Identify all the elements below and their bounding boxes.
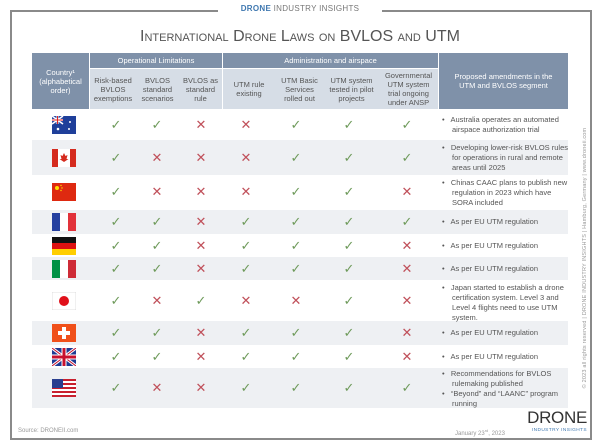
sub headers: Governmental	[385, 71, 432, 80]
row: Canada	[52, 143, 568, 172]
row: China: ✕	[402, 184, 412, 199]
row: China: • Chinas CAAC plans to publish new regulation in 2023 which have SORA included	[442, 178, 567, 207]
header	[32, 53, 568, 109]
row: France: ✓	[344, 214, 354, 229]
header: operational limitations	[90, 53, 222, 68]
sub headers: trial ongoing	[388, 89, 429, 98]
row: Japan: • Japan started to establish a drone certification system. Level 3 and Level 4 flights need to use UTM system.	[442, 283, 564, 322]
row: Japan: ✓	[344, 293, 354, 308]
row: Germany: ✓	[291, 238, 301, 253]
row: Germany: ✕	[402, 238, 412, 253]
sub headers: UTM system	[330, 76, 373, 84]
row: Switzerland: ✓	[291, 325, 301, 340]
row: China: ✓	[111, 184, 121, 199]
sub headers: under ANSP	[388, 98, 429, 107]
row: Japan: ✓	[196, 293, 206, 308]
header: proposed: Proposed amendments in the	[454, 72, 552, 81]
sub headers: BVLOS	[100, 84, 126, 94]
header: operational limitations: Operational Limitations	[118, 56, 194, 65]
row: United States: ✓	[344, 380, 354, 395]
row: Germany: ✓	[344, 238, 354, 253]
row: United Kingdom: ✓	[241, 349, 251, 364]
row: United States: ✓	[111, 380, 121, 395]
sub headers: rolled out	[284, 94, 315, 102]
sub headers: existing	[236, 89, 262, 98]
row: Canada: ✕	[152, 150, 162, 165]
row: Germany: ✓	[152, 238, 162, 253]
header: country: order)	[50, 86, 70, 94]
row: Australia: • Australia operates an automated airspace authorization trial	[442, 115, 559, 134]
row: Canada: ✕	[196, 150, 206, 165]
row: United Kingdom: ✕	[196, 349, 206, 364]
row: Switzerland	[52, 324, 538, 342]
row: United States: ✓	[402, 380, 412, 395]
row: Canada: ✓	[402, 150, 412, 165]
row shading	[32, 140, 568, 175]
row: Canada: ✓	[111, 150, 121, 165]
row: Canada: • Developing lower-risk BVLOS rules for operations in rural and remote areas until 2025	[442, 143, 568, 172]
row: Japan: ✕	[241, 293, 251, 308]
row: Australia: ✓	[291, 117, 301, 132]
row: Germany: • As per EU UTM regulation	[442, 241, 538, 250]
sub headers: projects	[338, 94, 365, 102]
row: China: ✕	[196, 184, 206, 199]
row: China: ✕	[152, 184, 162, 199]
sub headers: BVLOS as	[183, 76, 218, 84]
row: China: ✓	[291, 184, 301, 199]
row: United Kingdom: ✓	[111, 349, 121, 364]
sub headers: BVLOS	[145, 76, 170, 84]
header: country: Country¹	[46, 68, 75, 76]
sub headers	[90, 69, 438, 109]
row: China: ✓	[344, 184, 354, 199]
logo: INDUSTRY INSIGHTS	[532, 428, 587, 433]
row: Germany	[52, 237, 538, 255]
sub headers: UTM Basic	[281, 76, 318, 84]
header: country	[32, 53, 89, 109]
header: proposed: UTM and BVLOS segment	[459, 81, 548, 90]
row: Germany: ✓	[111, 238, 121, 253]
row: Japan: ✕	[152, 293, 162, 308]
row: Canada: ✓	[344, 150, 354, 165]
row: China	[52, 178, 568, 207]
row: Switzerland: ✕	[402, 325, 412, 340]
header: proposed	[439, 53, 568, 109]
row: France: ✓	[402, 214, 412, 229]
logo: DRONE	[527, 408, 587, 427]
row: Australia: ✕	[196, 117, 206, 132]
header: administration	[223, 53, 438, 68]
row: Australia: ✓	[402, 117, 412, 132]
top brand label	[218, 4, 382, 16]
row: United States: • Recommendations for BVLOS rulemaking published	[442, 369, 551, 388]
sub headers: standard	[186, 84, 215, 94]
row: United Kingdom: ✓	[152, 349, 162, 364]
row: China: ✕	[241, 184, 251, 199]
row: United States: ✓	[291, 380, 301, 395]
row: Italy: ✓	[111, 261, 121, 276]
row: Switzerland: • As per EU UTM regulation	[442, 328, 538, 337]
row: France: ✓	[291, 214, 301, 229]
row: United Kingdom: ✓	[291, 349, 301, 364]
row: Italy	[52, 260, 538, 278]
date: January 23rd , 2023	[455, 428, 505, 437]
row: Switzerland: ✕	[196, 325, 206, 340]
row: Italy: ✓	[152, 261, 162, 276]
row: France: • As per EU UTM regulation	[442, 217, 538, 226]
row: Italy: ✓	[291, 261, 301, 276]
row: France	[52, 213, 538, 231]
row: United States: ✕	[196, 380, 206, 395]
row: United States: ✓	[241, 380, 251, 395]
sub headers: Risk-based	[94, 76, 132, 84]
row: France: ✓	[152, 214, 162, 229]
row: Switzerland: ✓	[111, 325, 121, 340]
source footer: Source: DRONEII.com	[18, 428, 78, 434]
header: country: (alphabetical	[39, 76, 82, 86]
row: Japan	[52, 283, 564, 322]
header: administration: Administration and airspace	[284, 56, 377, 65]
sub headers: exemptions	[94, 94, 132, 102]
row: United States: ✕	[152, 380, 162, 395]
row: Switzerland: ✓	[241, 325, 251, 340]
sub headers: standard	[143, 84, 172, 94]
top brand label: DRONE INDUSTRY INSIGHTS	[241, 4, 359, 13]
title: International Drone Laws on BVLOS and UTM	[140, 28, 460, 45]
sub headers: UTM system	[387, 80, 430, 89]
row: Italy: ✓	[241, 261, 251, 276]
row: Australia: ✓	[152, 117, 162, 132]
row: United Kingdom: • As per EU UTM regulation	[442, 352, 538, 361]
row: Italy: ✕	[402, 261, 412, 276]
row: Japan: ✕	[402, 293, 412, 308]
row: Switzerland: ✓	[152, 325, 162, 340]
row: Australia	[52, 115, 559, 134]
sub headers: scenarios	[141, 94, 174, 102]
sub headers: Services	[285, 84, 314, 94]
row: Italy: ✓	[344, 261, 354, 276]
row: Italy: ✕	[196, 261, 206, 276]
row: Germany: ✓	[241, 238, 251, 253]
row: Japan: ✕	[291, 293, 301, 308]
row: United States	[52, 369, 558, 408]
sub headers: UTM rule	[234, 80, 264, 89]
sub headers: rule	[194, 94, 207, 102]
row: France: ✓	[111, 214, 121, 229]
row: Switzerland: ✓	[344, 325, 354, 340]
row: United Kingdom	[52, 348, 538, 366]
row: France: ✕	[196, 214, 206, 229]
row: Australia: ✓	[344, 117, 354, 132]
row: United Kingdom: ✓	[344, 349, 354, 364]
row: Canada: ✕	[241, 150, 251, 165]
sub headers: tested in pilot	[329, 84, 374, 94]
row: Germany: ✕	[196, 238, 206, 253]
row: Australia: ✓	[111, 117, 121, 132]
row: France: ✓	[241, 214, 251, 229]
row: Italy: • As per EU UTM regulation	[442, 264, 538, 273]
row: Canada: ✓	[291, 150, 301, 165]
text: © 2023 all rights reserved | DRONE INDUSTRY INSIGHTS | Hamburg, Germany | www.droneii.com	[582, 128, 588, 388]
row: Japan: ✓	[111, 293, 121, 308]
row: United States: • “Beyond” and “LAANC” program running	[442, 389, 558, 408]
row: United Kingdom: ✕	[402, 349, 412, 364]
row: Australia: ✕	[241, 117, 251, 132]
